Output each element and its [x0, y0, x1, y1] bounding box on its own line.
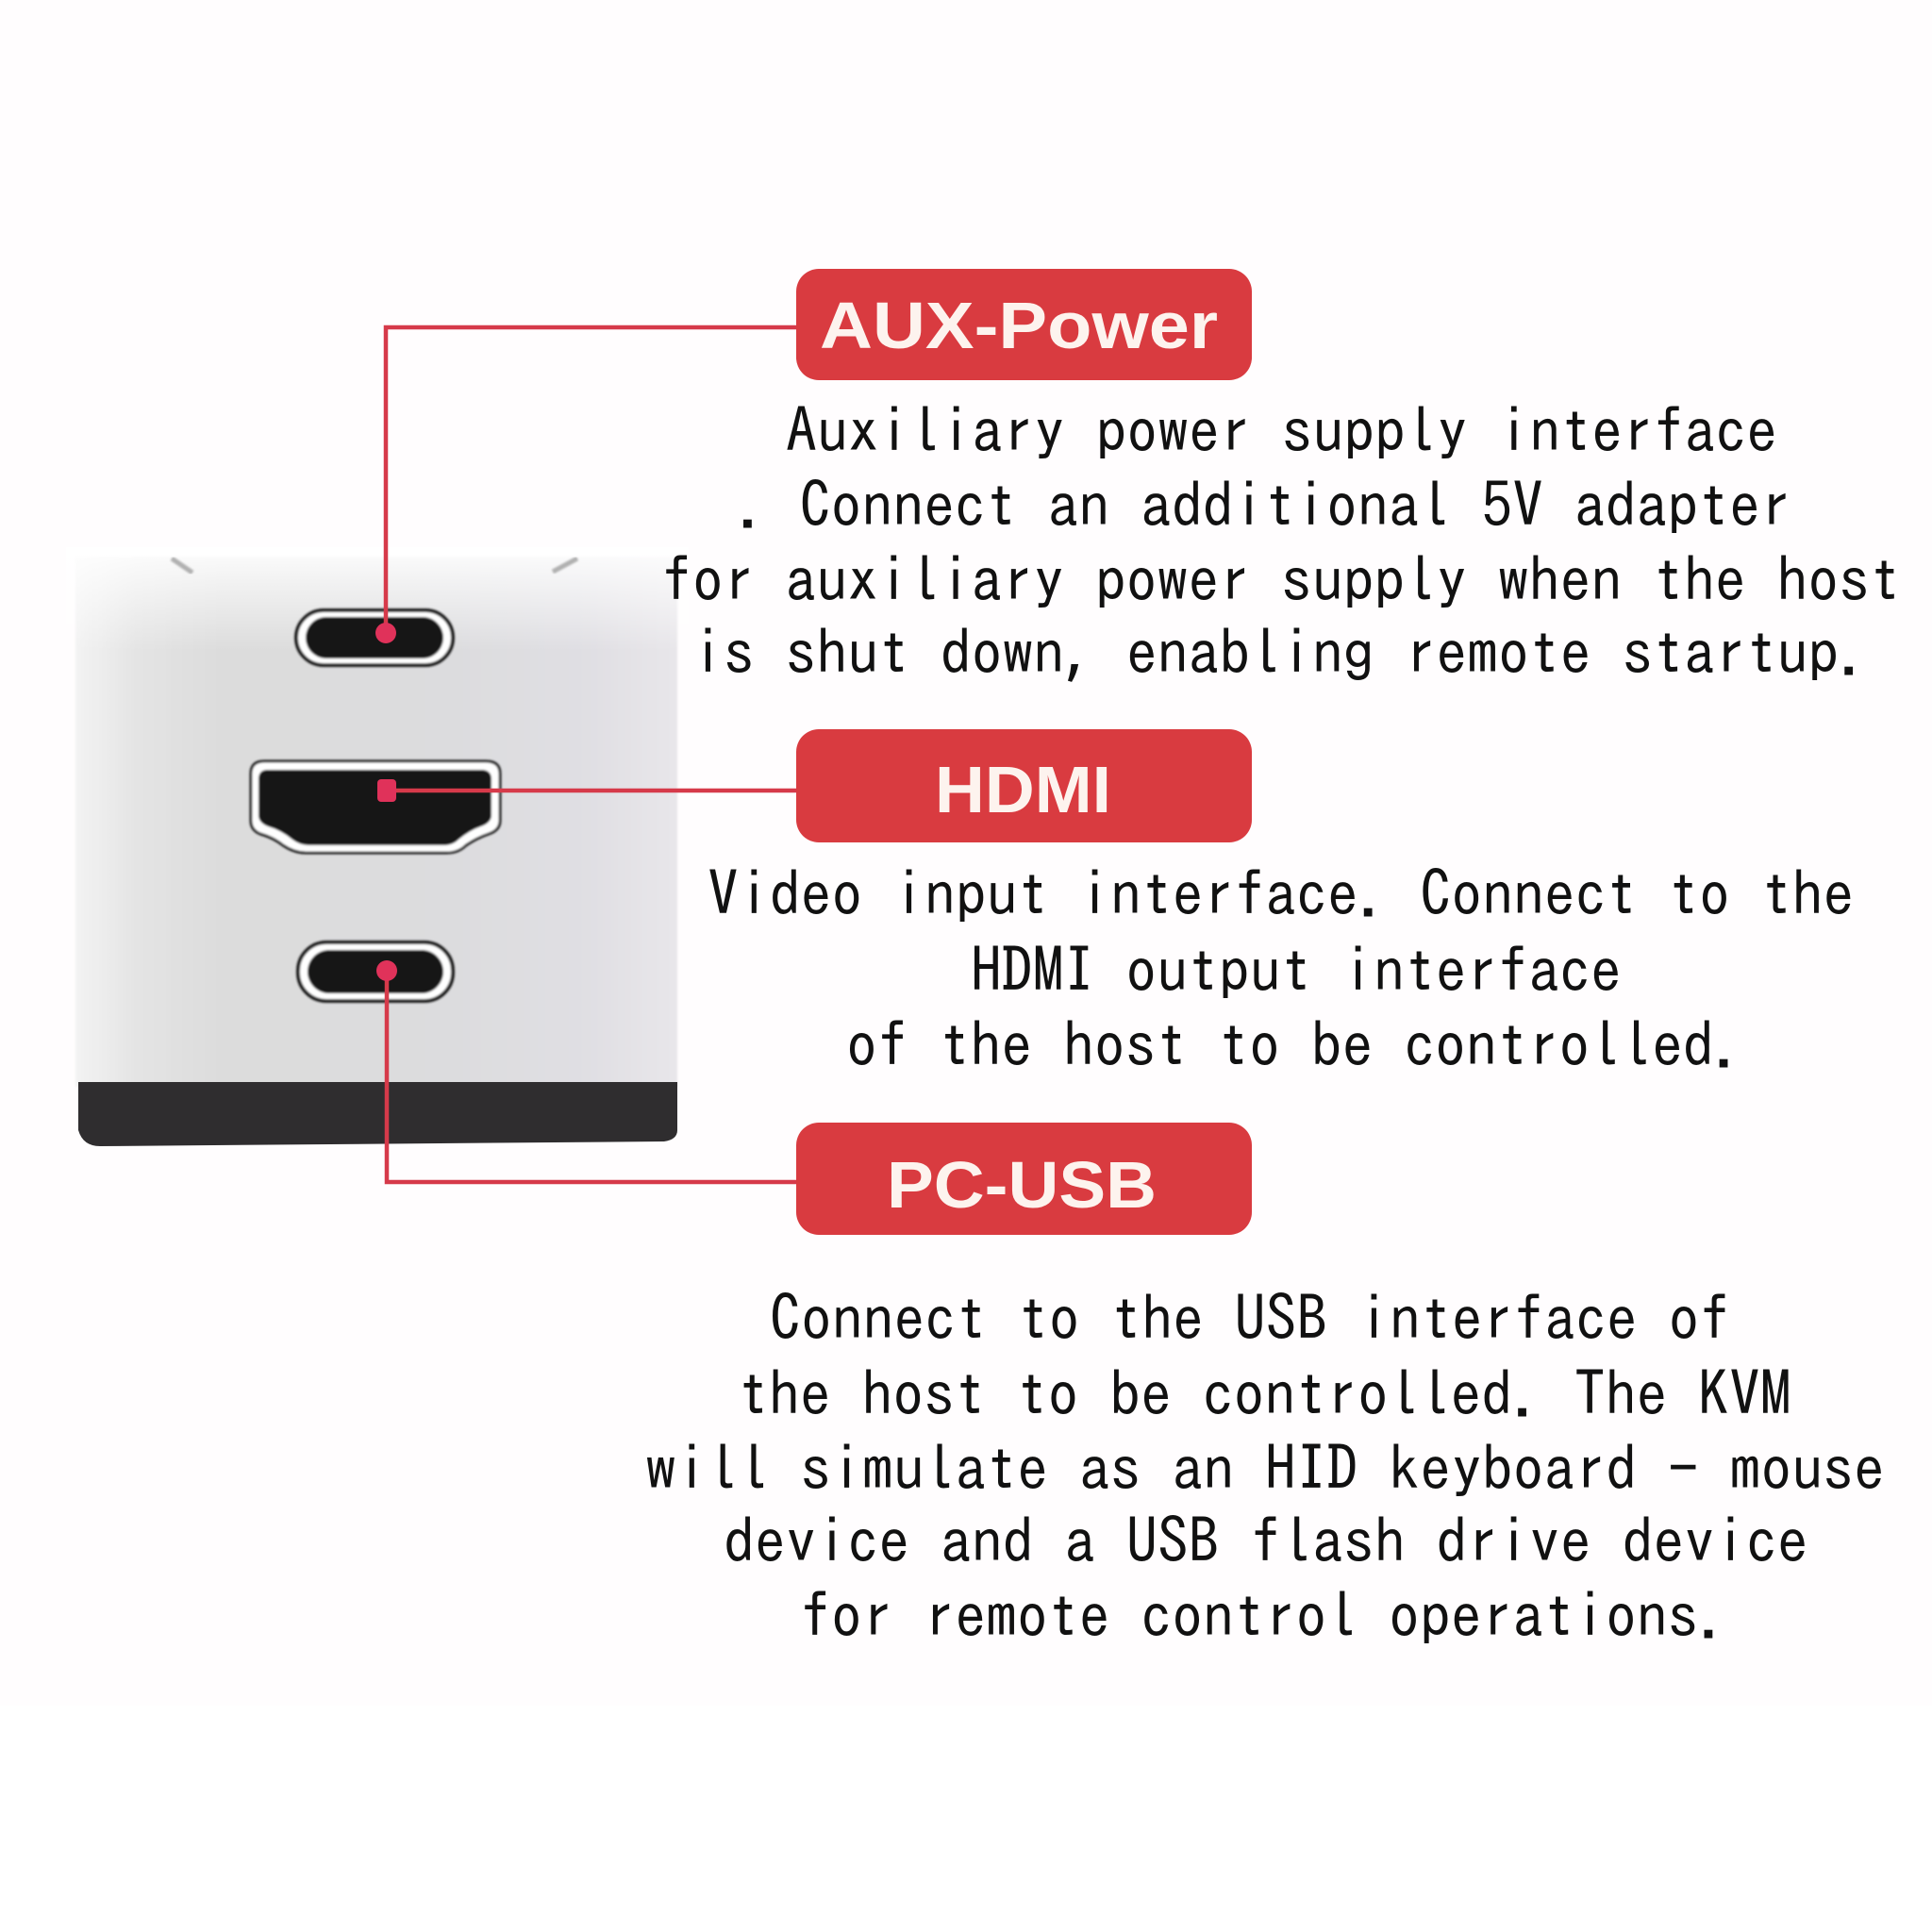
text: AUX-Power description: [661, 398, 1901, 682]
device body: [75, 557, 677, 1087]
label: PC-USB: [796, 1123, 1252, 1235]
text: HDMI description: HDMI output interface: [971, 938, 1622, 1000]
port: top USB-C: [296, 610, 453, 665]
label: AUX-Power: AUX-Power: [820, 289, 1218, 362]
connector: AUX-Power: [375, 327, 796, 643]
label: HDMI: [796, 729, 1252, 842]
text: PC-USB description: the host to be controlled. The KVM: [738, 1361, 1791, 1424]
port: HDMI: [251, 761, 500, 853]
label: HDMI: HDMI: [935, 753, 1111, 826]
text: PC-USB description: for remote control operations.: [800, 1583, 1729, 1645]
label: AUX-Power: [796, 269, 1252, 380]
text: PC-USB description: device and a USB flash drive device: [724, 1508, 1808, 1571]
text: HDMI description: of the host to be controlled.: [846, 1012, 1744, 1074]
text: AUX-Power description: Auxiliary power supply interface: [786, 398, 1777, 460]
device base: [78, 1082, 677, 1146]
text: PC-USB description: [645, 1286, 1885, 1645]
label: PC-USB: PC-USB: [887, 1148, 1157, 1222]
text: PC-USB description: will simulate as an HID keyboard - mouse: [645, 1436, 1885, 1498]
device illustration: [66, 547, 689, 1146]
text: AUX-Power description: is shut down, enabling remote startup.: [692, 620, 1870, 682]
port: bottom USB-C: [298, 942, 453, 1001]
connector: PC-USB: [376, 960, 796, 1182]
text: AUX-Power description: . Connect an additional 5V adapter: [738, 473, 1791, 535]
text: HDMI description: Video input interface. Connect to the: [708, 861, 1854, 924]
text: PC-USB description: Connect to the USB interface of: [770, 1286, 1730, 1348]
text: AUX-Power description: for auxiliary power supply when the host: [661, 547, 1901, 609]
connector: HDMI: [377, 779, 796, 802]
text: HDMI description: [708, 861, 1854, 1074]
